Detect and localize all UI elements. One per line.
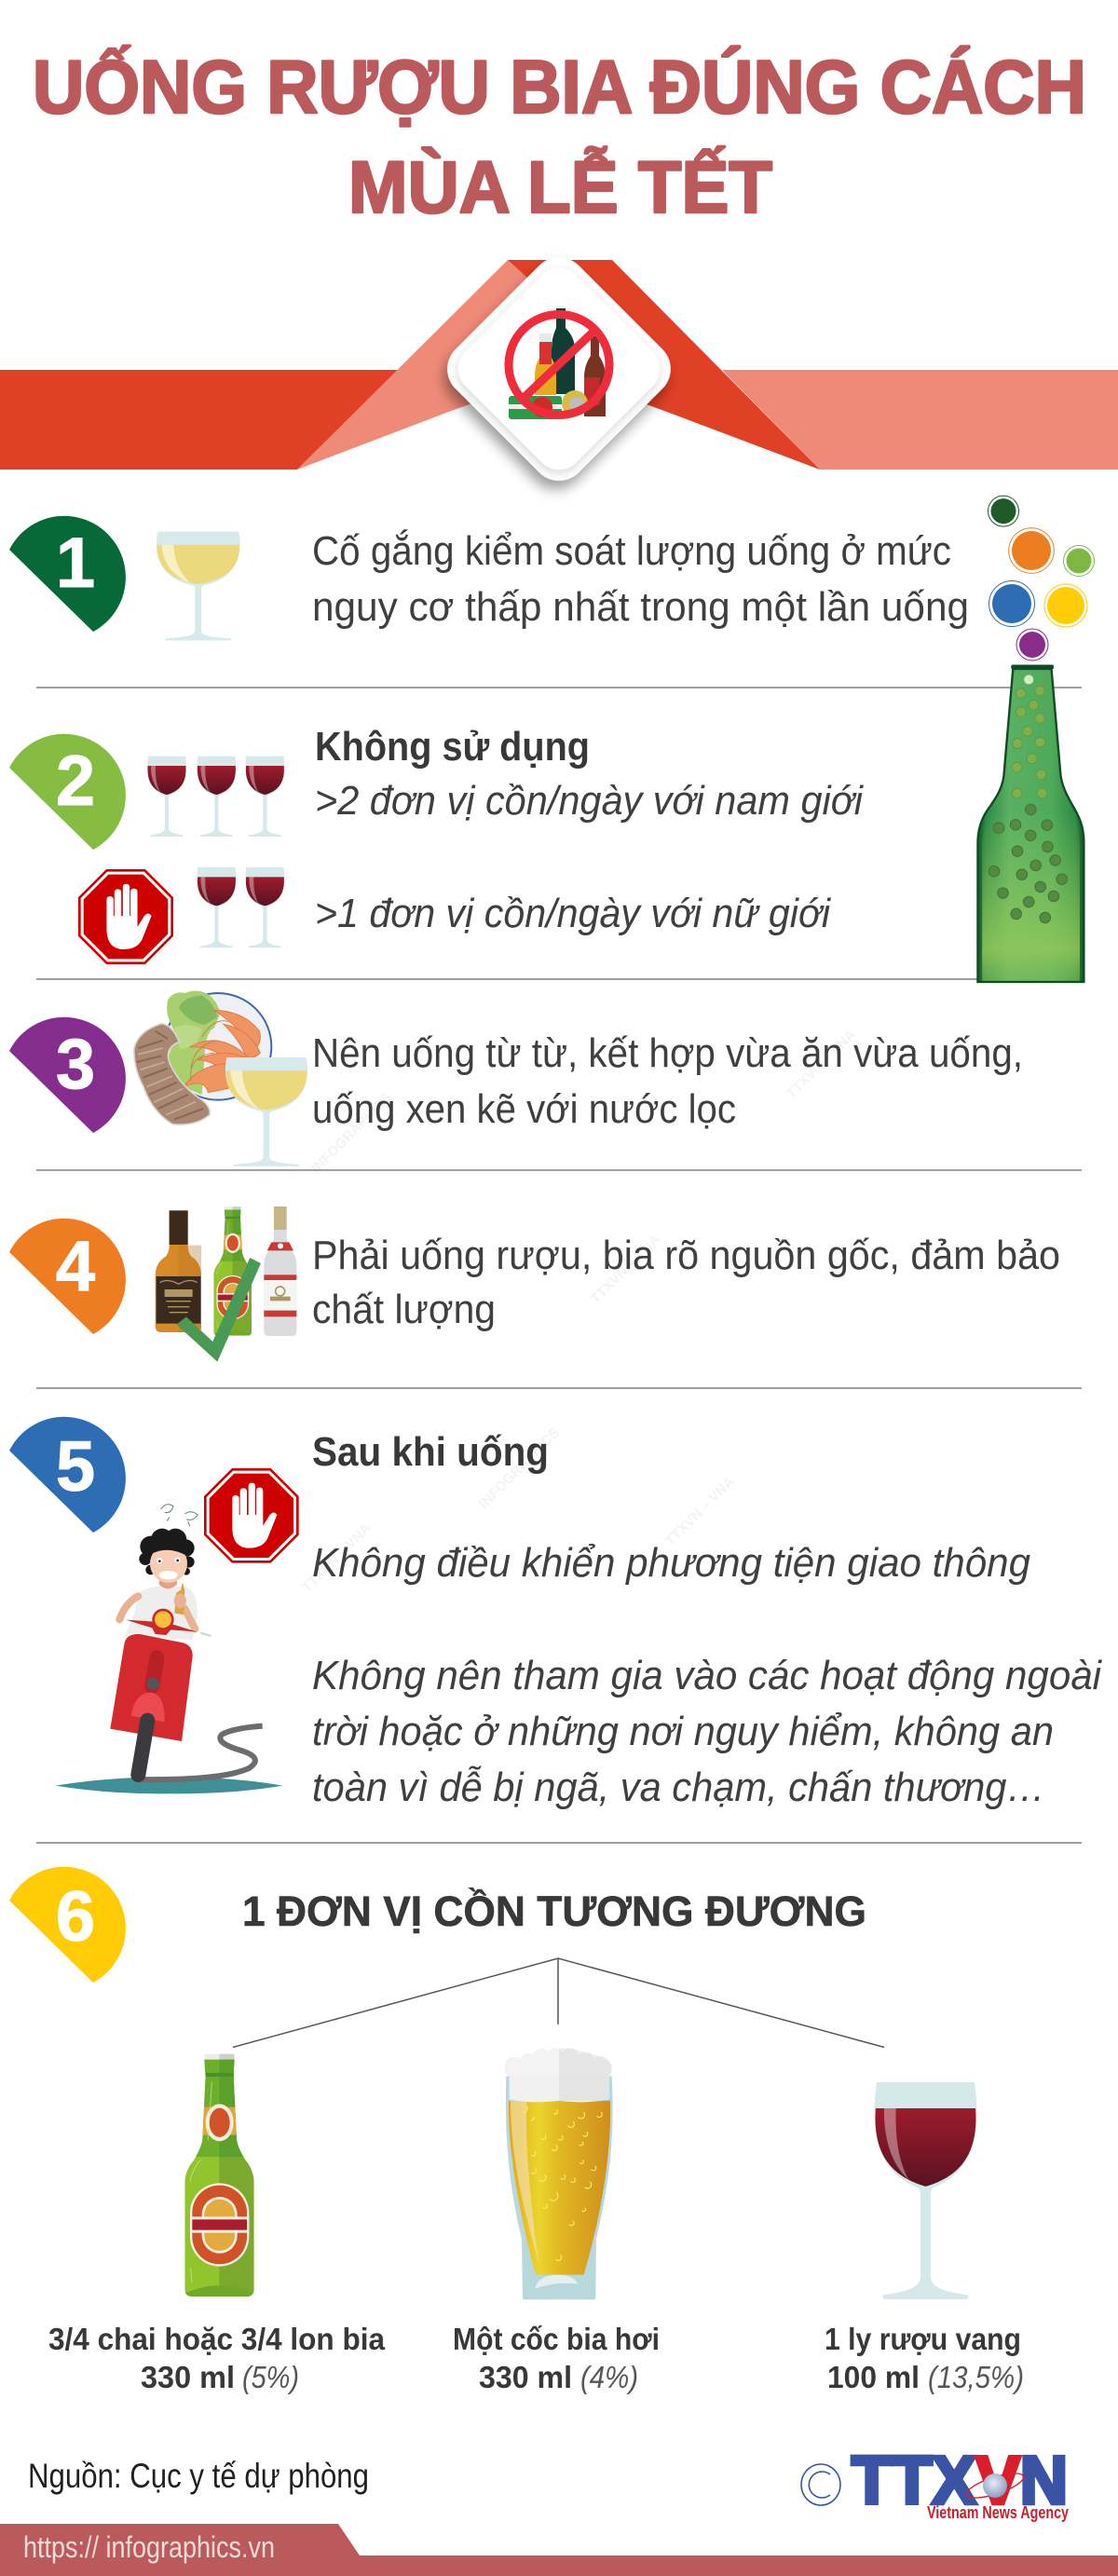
text: step 5: Không nên tham gia vào các hoạt động ngoài (312, 1653, 1102, 1698)
icon: coloured bubbles (988, 496, 1094, 661)
label: beer glass (453, 2322, 660, 2394)
label: beer bottle (48, 2322, 386, 2394)
text: step 5 (312, 1429, 1102, 1810)
panel: step 2 (9, 724, 864, 964)
title: UỐNG RƯỢU BIA ĐÚNG CÁCH (33, 45, 1086, 129)
panel: step 1 (9, 516, 969, 640)
label: beer bottle: (5%) (242, 2360, 299, 2394)
text: step 2: Không sử dụng (315, 724, 590, 770)
watermark: INFOGRAPHICS (476, 1424, 563, 1512)
text: step 1 (312, 528, 969, 630)
text: step 5: trời hoặc ở những nơi nguy hiểm, không an (312, 1709, 1054, 1754)
label: beer glass: Một cốc bia hơi (453, 2322, 660, 2356)
text: step 4 (312, 1233, 1060, 1332)
text: step 4: chất lượng (312, 1287, 496, 1332)
label: beer bottle: 3/4 chai hoặc 3/4 lon bia (48, 2322, 386, 2356)
source note: Nguồn: Cục y tế dự phòng (28, 2457, 369, 2495)
pin: number 6 (9, 1867, 126, 1983)
icon: beer glass (505, 2048, 613, 2299)
pin: number 6: 6 (56, 1877, 95, 1956)
label: wine glass: (13,5%) (928, 2360, 1024, 2394)
logo: TTXVN: TTXVN (852, 2444, 1068, 2518)
icon: drunk scooter rider (55, 1505, 282, 1793)
watermark: TTXVN – VNA (299, 1520, 375, 1596)
text: step 3 (312, 1030, 1023, 1132)
label: beer glass: 330 ml (479, 2360, 572, 2394)
pin: number 4: 4 (56, 1227, 95, 1306)
pin: number 2 (9, 734, 126, 850)
text: step 5: toàn vì dễ bị ngã, va chạm, chấn thương… (312, 1765, 1045, 1810)
text: step 3: Nên uống từ từ, kết hợp vừa ăn vừa uống, (312, 1030, 1023, 1076)
footer bar (0, 2524, 1118, 2576)
panel: step 4 (9, 1206, 1060, 1362)
pin: number 2: 2 (56, 742, 95, 821)
title: MÙA LỄ TẾT (348, 145, 772, 228)
text: step 2 (315, 724, 864, 936)
panel: step 5 (9, 1417, 1102, 1810)
watermark: TTXVN – VNA (784, 1027, 859, 1102)
icon: stop hand sign (204, 1468, 299, 1563)
text: step 4: Phải uống rượu, bia rõ nguồn gốc, đảm bảo (312, 1233, 1060, 1278)
label: beer bottle: 330 ml (141, 2360, 235, 2394)
icon: bottles with check mark (156, 1206, 296, 1362)
pin: number 3: 3 (56, 1025, 95, 1104)
icon: food plate (134, 991, 271, 1124)
pin: number 5 (9, 1417, 126, 1533)
divider lines (36, 688, 1082, 1843)
label: wine glass: 100 ml (827, 2360, 920, 2394)
title (33, 45, 1086, 228)
text: step 2: >2 đơn vị cồn/ngày với nam giới (315, 778, 864, 824)
icon: three red wine glasses (147, 756, 284, 837)
watermark: INFOGRAPHICS (308, 1089, 395, 1177)
text: step 5: Sau khi uống (312, 1429, 549, 1475)
icon: prohibited bottles (509, 308, 609, 419)
panel: step 6 (9, 1867, 1024, 2394)
heading: one alcohol unit: 1 ĐƠN VỊ CỒN TƯƠNG ĐƯƠNG (242, 1888, 866, 1935)
watermark: TTXVN – VNA (588, 1232, 663, 1307)
pin: number 3 (9, 1017, 126, 1133)
pin: number 1 (9, 516, 126, 632)
panel: step 3 (9, 991, 1023, 1166)
pin: number 4 (9, 1219, 126, 1334)
text: step 3: uống xen kẽ với nước lọc (312, 1086, 736, 1132)
text: step 2: >1 đơn vị cồn/ngày với nữ giới (315, 891, 831, 936)
logo: TTXVN: Vietnam News Agency (927, 2503, 1069, 2522)
ribbon banner (0, 260, 1118, 470)
text: step 1: nguy cơ thấp nhất trong một lần uống (312, 584, 969, 630)
diamond badge: no alcohol (436, 246, 682, 492)
label: wine glass: 1 ly rượu vang (825, 2322, 1021, 2356)
connector lines (233, 1958, 884, 2048)
text: step 1: Cố gắng kiểm soát lượng uống ở mức (312, 528, 951, 574)
pin: number 1: 1 (56, 524, 95, 603)
pin: number 5: 5 (56, 1427, 95, 1506)
icon: two red wine glasses (198, 867, 284, 947)
icon: stop hand sign (78, 869, 173, 964)
icon: beer bottle (184, 2054, 256, 2298)
text: step 5: Không điều khiển phương tiện giao thông (312, 1540, 1031, 1586)
icon: green bottle (977, 665, 1084, 982)
icon: white wine glass (225, 1057, 307, 1166)
footer bar: https:// infographics.vn (23, 2530, 275, 2564)
icon: white wine glass (157, 531, 240, 640)
label: wine glass (825, 2322, 1024, 2394)
watermark: TTXVN – VNA (662, 1474, 738, 1549)
icon: red wine glass (875, 2082, 976, 2299)
label: beer glass: (4%) (580, 2360, 638, 2394)
watermark (299, 1027, 859, 1596)
